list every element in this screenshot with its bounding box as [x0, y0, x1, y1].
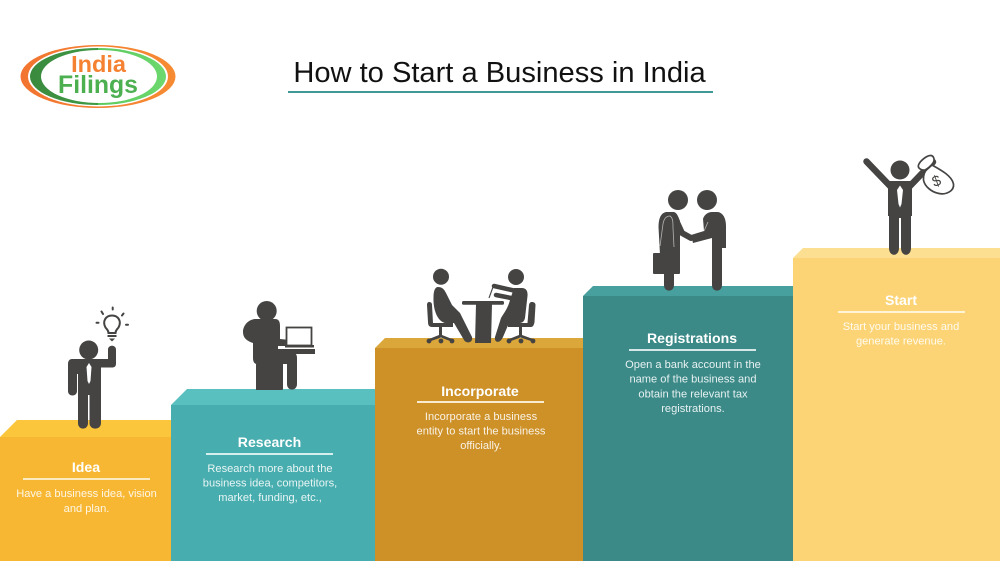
text: Start description: generate revenue. [856, 336, 946, 348]
text: Research description: business idea, competitors, [203, 478, 337, 490]
logo: India Filings: Filings [58, 72, 138, 99]
text: Registrations description: Open a bank account in the [625, 359, 761, 371]
text: Idea description: and plan. [64, 503, 109, 515]
logo: India Filings: India [71, 51, 127, 77]
step: Registrations [583, 286, 793, 561]
icon: two people meeting at a table [427, 269, 536, 343]
text: Research description: market, funding, etc., [218, 492, 322, 504]
icon: man with light bulb [68, 308, 128, 429]
text: Idea description: Have a business idea, vision [16, 488, 157, 500]
step: Incorporate [375, 338, 583, 561]
text: Incorporate description: Incorporate a business [425, 411, 538, 423]
text: Incorporate description: entity to start the business [417, 426, 546, 438]
text: Registrations description: registrations. [661, 403, 725, 415]
text: Start description: Start your business and [843, 321, 959, 333]
icon: handshake with briefcase [653, 190, 726, 291]
heading: Idea: Idea [72, 459, 100, 475]
title: How to Start a Business in India [293, 57, 707, 89]
heading: Start: Start [885, 292, 917, 308]
heading: Registrations: Registrations [647, 330, 737, 346]
icon: man celebrating with money bag: $ [930, 172, 944, 191]
icon: man at laptop [243, 301, 315, 390]
icon: man celebrating with money bag [866, 155, 954, 255]
step: Research [171, 389, 375, 561]
step: Idea [0, 420, 171, 561]
text: Registrations description: name of the business and [629, 374, 757, 386]
text: Research description: Research more about the [207, 463, 333, 475]
step: Start [793, 248, 1000, 561]
heading: Research: Research [238, 434, 301, 450]
heading: Incorporate: Incorporate [441, 383, 519, 399]
text: Incorporate description: officially. [460, 440, 502, 452]
text: Registrations description: obtain the relevant tax [638, 388, 748, 400]
logo: India Filings [20, 45, 176, 108]
